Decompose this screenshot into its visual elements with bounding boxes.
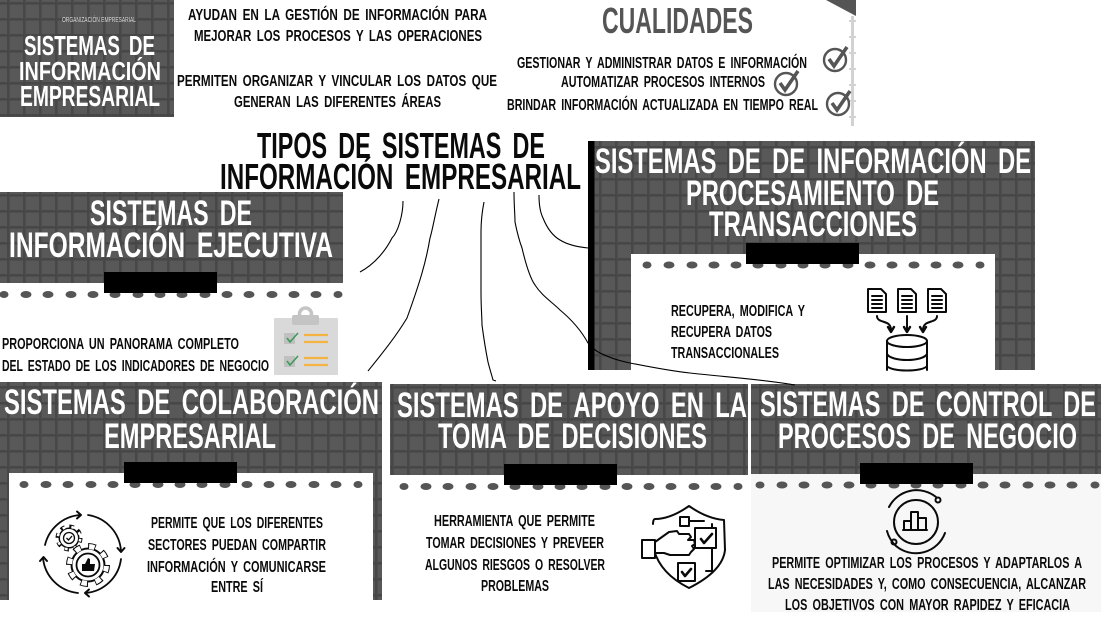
- heading: [595, 141, 1031, 244]
- heading: SISTEMAS DE APOYO EN LA: [397, 386, 747, 425]
- icon: clipboard: [274, 308, 338, 375]
- icon: chart in circle: [887, 490, 945, 553]
- text block: introduction: [177, 5, 497, 111]
- heading: [397, 386, 747, 456]
- description: [147, 515, 326, 596]
- black label: [860, 463, 973, 484]
- heading: PROCESAMIENTO DE: [686, 174, 939, 213]
- description: DEL ESTADO DE LOS INDICADORES DE NEGOCIO: [2, 358, 269, 375]
- cover title: EMPRESARIAL: [20, 81, 160, 113]
- heading: [760, 385, 1096, 456]
- icon: check 3: [827, 91, 850, 115]
- cualidades list: AUTOMATIZAR PROCESOS INTERNOS: [561, 74, 765, 91]
- text block: introduction: PERMITEN ORGANIZAR Y VINCULAR LOS DATOS QUE: [177, 73, 497, 90]
- panel: información ejecutiva: [0, 192, 343, 375]
- description: PROPORCIONA UN PANORAMA COMPLETO: [2, 336, 239, 353]
- white card: [9, 473, 373, 600]
- icon: check 1: [824, 47, 847, 71]
- description: [425, 513, 605, 595]
- description: TOMAR DECISIONES Y PREVEER: [426, 535, 604, 552]
- description: [768, 555, 1086, 614]
- connector: to apoyo en la toma de decisiones: [481, 202, 496, 381]
- black label: [504, 464, 617, 485]
- text block: introduction: GENERAN LAS DIFERENTES ÁREAS: [234, 92, 441, 111]
- heading: INFORMACIÓN EJECUTIVA: [9, 225, 333, 265]
- black label: [124, 462, 237, 483]
- cualidades list: BRINDAR INFORMACIÓN ACTUALIZADA EN TIEMPO REAL: [507, 95, 818, 114]
- panel: cualidades: [507, 0, 856, 126]
- connector: to control de procesos: [514, 192, 795, 385]
- cover title: INFORMACIÓN: [19, 56, 161, 86]
- description: RECUPERA, MODIFICA Y: [671, 303, 805, 320]
- title: INFORMACIÓN EMPRESARIAL: [220, 155, 581, 197]
- connector: to información ejecutiva: [360, 201, 403, 272]
- description: INFORMACIÓN Y COMUNICARSE: [147, 557, 326, 576]
- black label: [746, 243, 859, 264]
- heading: SISTEMAS DE COLABORACIÓN: [4, 382, 379, 422]
- heading: TOMA DE DECISIONES: [438, 417, 707, 456]
- panel: colaboración empresarial: [0, 382, 382, 600]
- connector: to colaboración empresarial: [368, 199, 439, 371]
- cualidades heading: CUALIDADES: [602, 0, 753, 41]
- description: ENTRE SÍ: [211, 577, 263, 596]
- panel: apoyo en la toma de decisiones: [390, 384, 748, 595]
- cover kicker: ORGANIZACIÓN EMPRESARIAL: [62, 15, 136, 24]
- cualidades list: [507, 53, 818, 114]
- text block: introduction: AYUDAN EN LA GESTIÓN DE INFORMACIÓN PARA: [188, 5, 487, 24]
- title: TIPOS DE SISTEMAS DE: [257, 125, 545, 166]
- white card: [631, 254, 995, 370]
- icon: gears cycle: [40, 512, 124, 596]
- icon: shield with decisions: [642, 506, 725, 588]
- description: PERMITE QUE LOS DIFERENTES: [151, 515, 323, 532]
- description: PROBLEMAS: [481, 578, 549, 595]
- connector: to procesamiento de transacciones: [539, 195, 588, 248]
- heading: [9, 194, 333, 265]
- cualidades list: GESTIONAR Y ADMINISTRAR DATOS E INFORMACIÓN: [517, 53, 807, 72]
- cover title: [19, 30, 161, 113]
- heading: TRANSACCIONES: [709, 205, 917, 244]
- panel: control de procesos de negocio: [751, 384, 1101, 614]
- description: [2, 336, 269, 375]
- description: SECTORES PUEDAN COMPARTIR: [148, 537, 326, 554]
- black label: [104, 272, 217, 293]
- panel: procesamiento de transacciones: [588, 141, 1035, 370]
- heading: [4, 382, 379, 456]
- description: TRANSACCIONALES: [671, 345, 779, 362]
- heading: EMPRESARIAL: [104, 417, 276, 456]
- heading: SISTEMAS DE: [90, 194, 252, 233]
- description: ALGUNOS RIESGOS O RESOLVER: [425, 557, 605, 574]
- icon: check 2: [775, 71, 798, 95]
- icon: documents into database: [868, 289, 946, 370]
- title: [220, 125, 581, 197]
- description: RECUPERA DATOS: [671, 324, 772, 341]
- panel: cover: [0, 0, 174, 117]
- description: [671, 303, 805, 362]
- description: HERRAMIENTA QUE PERMITE: [434, 513, 595, 530]
- text block: introduction: MEJORAR LOS PROCESOS Y LAS OPERACIONES: [194, 28, 482, 45]
- cover title: SISTEMAS DE: [24, 30, 155, 61]
